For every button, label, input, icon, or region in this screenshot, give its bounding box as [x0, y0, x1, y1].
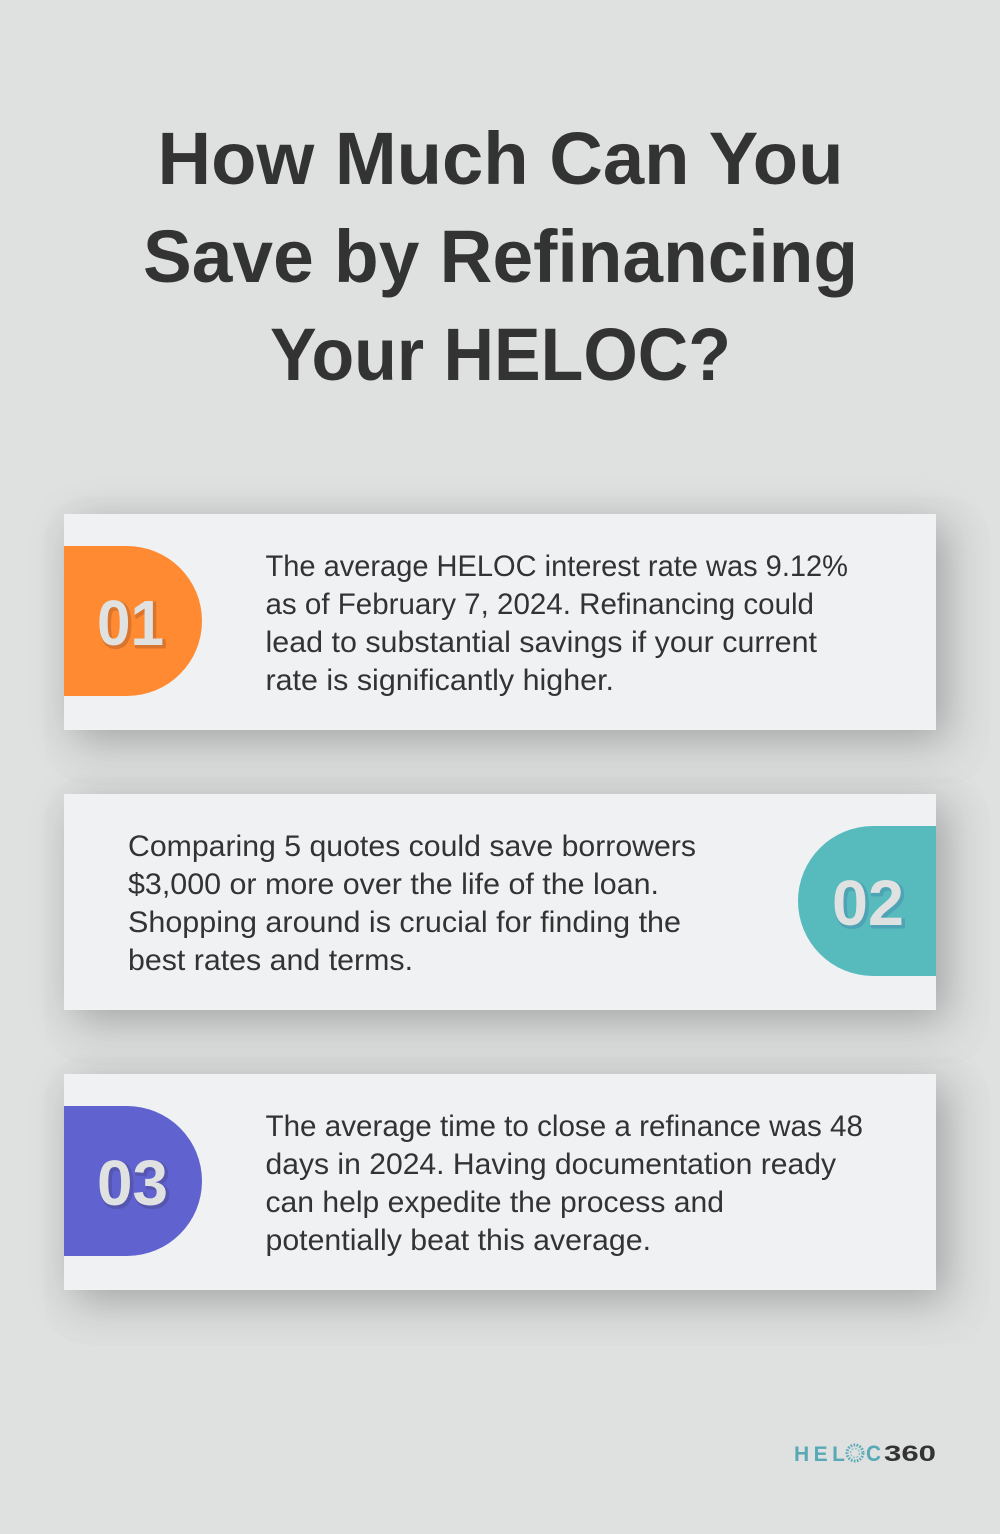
title: Save by Refinancing [143, 215, 858, 298]
logo: HELOC360: 360 [884, 1441, 936, 1466]
text block 03 [266, 1110, 863, 1257]
badge 01: 01 [97, 587, 164, 659]
badge 03 [64, 1106, 202, 1256]
text block 01 [266, 550, 848, 697]
title: How Much Can You [158, 117, 844, 200]
text block 02: best rates and terms. [128, 944, 413, 977]
text block 01: rate is significantly higher. [266, 664, 614, 697]
text block 03: The average time to close a refinance was 48 [266, 1110, 863, 1143]
text block 02: Shopping around is crucial for finding the [128, 906, 681, 939]
text block 01: lead to substantial savings if your current [266, 626, 818, 659]
badge 02 [798, 826, 936, 976]
logo: HELOC360 [794, 1441, 936, 1466]
badge 03: 03 [99, 1149, 170, 1221]
badge 02: 02 [832, 867, 904, 939]
logo: HELOC360: C [866, 1441, 881, 1466]
title [143, 117, 858, 396]
text block 01: The average HELOC interest rate was 9.12% [266, 550, 848, 583]
text block 02 [128, 830, 696, 977]
logo: HELOC360: HEL [794, 1443, 845, 1466]
text block 03: days in 2024. Having documentation ready [266, 1148, 836, 1181]
panel: card 01 [64, 514, 936, 730]
panel: card 03 [64, 1074, 936, 1290]
text block 02: Comparing 5 quotes could save borrowers [128, 830, 696, 863]
text block 03: can help expedite the process and [266, 1186, 724, 1219]
badge 01 [64, 546, 202, 696]
text block 01: as of February 7, 2024. Refinancing could [266, 588, 814, 621]
text block 02: $3,000 or more over the life of the loan. [128, 868, 659, 901]
badge 03: 03 [97, 1147, 168, 1219]
badge 01: 01 [99, 589, 166, 661]
title: Your HELOC? [270, 313, 731, 396]
panel: card 02 [64, 794, 936, 1010]
text block 03: potentially beat this average. [266, 1224, 651, 1257]
badge 02: 02 [834, 869, 906, 941]
